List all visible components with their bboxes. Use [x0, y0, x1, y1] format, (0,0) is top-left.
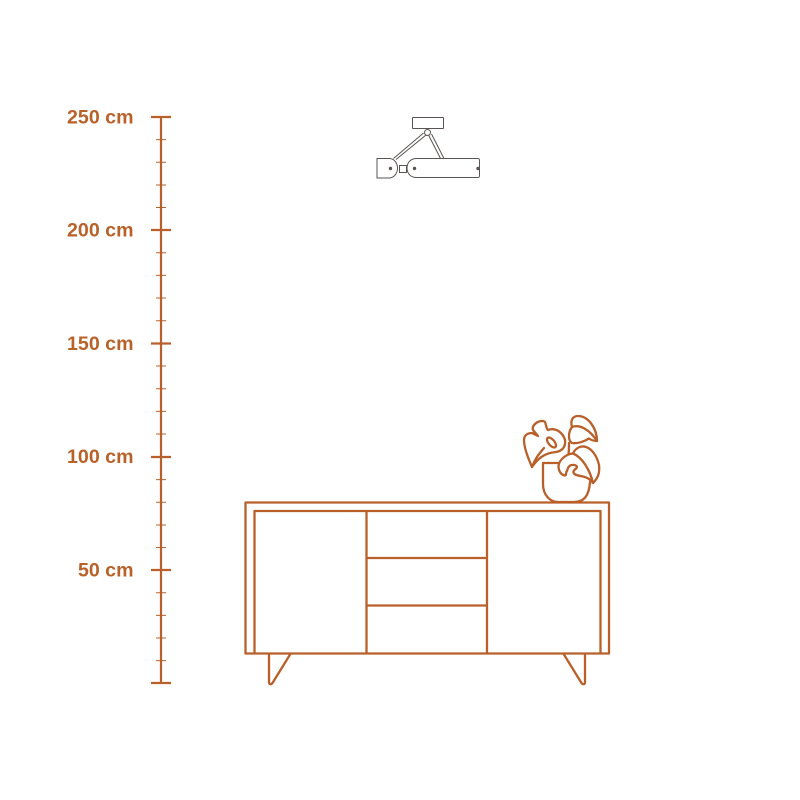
icon: potted plant [524, 416, 599, 502]
scale label: 150 cm: 150 cm [67, 333, 134, 355]
cabinet outer frame [246, 502, 609, 654]
right leg [563, 653, 585, 684]
scale label: 250 cm: 250 cm [67, 106, 134, 128]
height scale ruler [151, 117, 171, 683]
scale label: 200 cm: 200 cm [67, 220, 134, 242]
cabinet inner frame [254, 511, 600, 653]
left monstera leaf [524, 421, 565, 467]
scale label: 100 cm: 100 cm [67, 446, 134, 468]
lower right leaf [558, 446, 599, 483]
plant stem [568, 443, 569, 458]
scale label: 50 cm: 50 cm [78, 560, 134, 582]
upper right leaf [569, 416, 597, 443]
plant pot [543, 463, 590, 502]
centre drawers [366, 511, 487, 653]
icon: ceiling lamp [377, 118, 480, 178]
sideboard [246, 502, 609, 684]
left leg [269, 653, 291, 684]
